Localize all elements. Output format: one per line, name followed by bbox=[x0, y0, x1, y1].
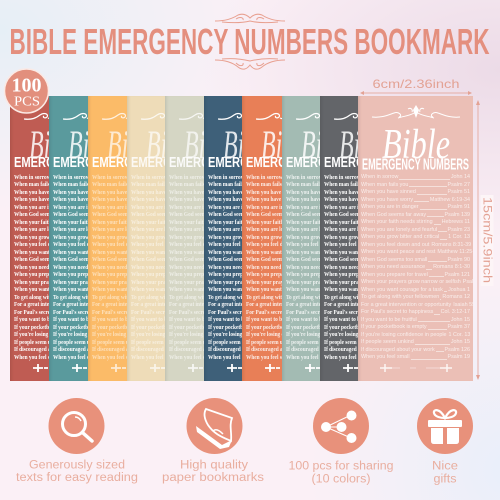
bookmark strip: coral: When you have bbox=[246, 196, 281, 203]
caption: reading: texts for easy reading bbox=[16, 472, 138, 484]
bookmark strip: charcoal: When you have bbox=[324, 188, 358, 196]
verse list: To get along with your fellowmen Romans 12 bbox=[361, 294, 470, 300]
bookmark strip: orange: When you have bbox=[92, 188, 126, 196]
bookmark strip: navy: When you need bbox=[208, 264, 242, 270]
bookmark strip: teal: When you want bbox=[52, 286, 88, 293]
verse list: When you have worry Matthew 6:19-34 bbox=[361, 196, 470, 202]
bookmark strip: coral: When you want bbox=[246, 248, 282, 256]
bookmark strip: grey green: When you have bbox=[286, 188, 320, 196]
caption: reading: Generously sized bbox=[29, 460, 125, 472]
icon: gift bbox=[417, 398, 473, 454]
icon: share bbox=[313, 398, 369, 454]
verse list: When you prepare for travel Psalm 121 bbox=[361, 272, 470, 278]
caption: sharing: 100 pcs for sharing bbox=[288, 460, 394, 472]
verse list: When you feel small Psalm 19 bbox=[361, 354, 470, 360]
width dimension: 6cm/2.36inch bbox=[372, 77, 460, 91]
icon: paper bbox=[186, 398, 242, 454]
bookmark strip: teal: To get along wit bbox=[52, 294, 88, 300]
verse list: If people seem unkind John 15 bbox=[361, 339, 470, 345]
bookmark strip: grey green bbox=[282, 96, 320, 380]
bookmark strip: teal: When you have bbox=[52, 188, 88, 196]
bookmark strip: grey green: When you need bbox=[286, 264, 320, 270]
bookmark strip: coral: When you want bbox=[246, 286, 282, 293]
bookmark strip: teal: When you grow bbox=[52, 234, 88, 240]
bookmark strip: charcoal bbox=[320, 96, 358, 380]
bookmark strip: cream: When you have bbox=[130, 188, 165, 196]
icon: magnifier bbox=[48, 398, 104, 454]
main bookmark ornament bbox=[372, 105, 460, 118]
main bookmark script title: Bible bbox=[382, 122, 450, 168]
badge: 100 pcs bbox=[4, 69, 48, 113]
caption: paper: High quality bbox=[180, 460, 248, 472]
verse list: For a great intervention or opportunity Isaiah 55 bbox=[361, 302, 473, 308]
bookmark strip: charcoal: When you need bbox=[324, 264, 358, 270]
bookmark strip: sage: When you need bbox=[169, 264, 204, 270]
bookmark strip: coral: When man fails bbox=[246, 181, 282, 188]
verse list: When God seems too small Psalm 90 bbox=[361, 256, 470, 262]
bookmark strip: coral: When you grow bbox=[246, 234, 282, 240]
verse list bbox=[361, 174, 473, 360]
caption: sharing bbox=[288, 460, 394, 486]
bookmark strip: charcoal: When you have bbox=[324, 196, 358, 203]
verse list: If you want to be fruitful John 15 bbox=[361, 316, 470, 322]
bookmark strip: teal: When you want bbox=[52, 248, 88, 256]
title ornament bottom bbox=[215, 59, 285, 69]
bookmark strip: red: When you have bbox=[14, 188, 48, 196]
caption: gifts bbox=[432, 460, 458, 486]
verse list: When you want courage for a task Joshua 1 bbox=[361, 286, 470, 292]
verse list: When you have sinned Psalm 51 bbox=[361, 189, 470, 195]
bookmark strip: sage: When you have bbox=[169, 188, 204, 196]
bookmark strip: coral bbox=[242, 96, 282, 380]
caption: sharing: (10 colors) bbox=[312, 474, 371, 486]
bookmark strip: coral: To get along wit bbox=[246, 294, 282, 300]
badge: 100 pcs: PCS bbox=[14, 94, 40, 108]
bookmark strip: cream bbox=[126, 96, 165, 380]
caption: gifts: gifts bbox=[434, 474, 457, 486]
verse list: When you need assurance Romans 8:1-30 bbox=[361, 264, 470, 270]
bookmark strip: teal: When man fails bbox=[52, 181, 88, 188]
verse list: When your faith needs stirring Hebrews 11 bbox=[361, 219, 470, 225]
bookmark strip: teal: If you want to b bbox=[52, 316, 88, 323]
bookmark strip: coral: When in sorrow bbox=[246, 174, 282, 180]
caption: paper: paper bookmarks bbox=[162, 472, 264, 484]
bookmark strip: coral: When you need bbox=[246, 264, 281, 270]
verse list: When you are in danger Psalm 91 bbox=[361, 204, 470, 210]
height dimension: 15cm/5.9inch bbox=[480, 197, 492, 283]
bookmark strip: grey green: When you have bbox=[286, 196, 320, 203]
verse list: When you feel down and out Romans 8:31-39 bbox=[361, 242, 471, 248]
verse list: When in sorrow John 14 bbox=[361, 174, 470, 180]
bookmark strip: teal: When you have bbox=[52, 196, 88, 203]
bookmark strip: teal: When in sorrow bbox=[52, 174, 88, 180]
bookmark strip: teal: When you feel s bbox=[52, 354, 88, 360]
height dimension bbox=[476, 100, 494, 380]
verse list: If you're losing confidence in people 1 Cor. 13 bbox=[361, 332, 470, 338]
bookmark strip: sage bbox=[165, 96, 204, 380]
bookmark strip: navy: When you have bbox=[208, 196, 242, 203]
verse list: If discouraged about your work Psalm 126 bbox=[361, 346, 470, 352]
bookmark strip: coral: When you have bbox=[246, 188, 281, 196]
verse list: When you grow bitter and critical 1 Cor. 13 bbox=[361, 234, 470, 240]
verse list: When you are lonely and fearful Psalm 23 bbox=[361, 226, 470, 232]
verse list: If your pocketbook is empty Psalm 37 bbox=[361, 324, 470, 330]
bookmark strip: teal: When you need bbox=[52, 264, 88, 270]
bookmark strip: orange: When you need bbox=[92, 264, 126, 270]
bookmark strip: sage: When you have bbox=[169, 196, 204, 203]
bookmark strip: navy bbox=[204, 96, 242, 380]
caption: paper bbox=[162, 460, 264, 484]
bookmark strip: red bbox=[10, 96, 48, 380]
bookmark strip: cream: When you have bbox=[130, 196, 165, 203]
verse list: For Paul's secret to happiness Col. 3:12-17 bbox=[361, 309, 470, 315]
panel: main pink bookmark bbox=[358, 96, 473, 380]
bookmark strip: red: When you have bbox=[14, 196, 48, 203]
caption: gifts: Nice bbox=[432, 460, 458, 472]
bookmark strip: red: When you need bbox=[14, 264, 48, 270]
badge: 100 pcs: 100 bbox=[12, 74, 42, 96]
caption: reading bbox=[16, 460, 138, 484]
bookmark strip: coral: When you feel s bbox=[246, 354, 282, 360]
width dimension bbox=[360, 77, 472, 95]
bookmark strip: coral: If you want to b bbox=[246, 316, 282, 323]
verse list: When God seems far away Psalm 139 bbox=[361, 212, 470, 218]
main bookmark footer ornament bbox=[380, 364, 452, 372]
bookmark strip: orange bbox=[88, 96, 126, 380]
title ornament top bbox=[215, 14, 285, 23]
bookmark strip: orange: When you have bbox=[92, 196, 126, 203]
bookmark strip: navy: When you have bbox=[208, 188, 242, 196]
verse list: When man fails you Psalm 27 bbox=[361, 182, 470, 188]
bookmark strip: cream: When you need bbox=[130, 264, 165, 270]
bookmark strip: teal bbox=[48, 96, 88, 380]
